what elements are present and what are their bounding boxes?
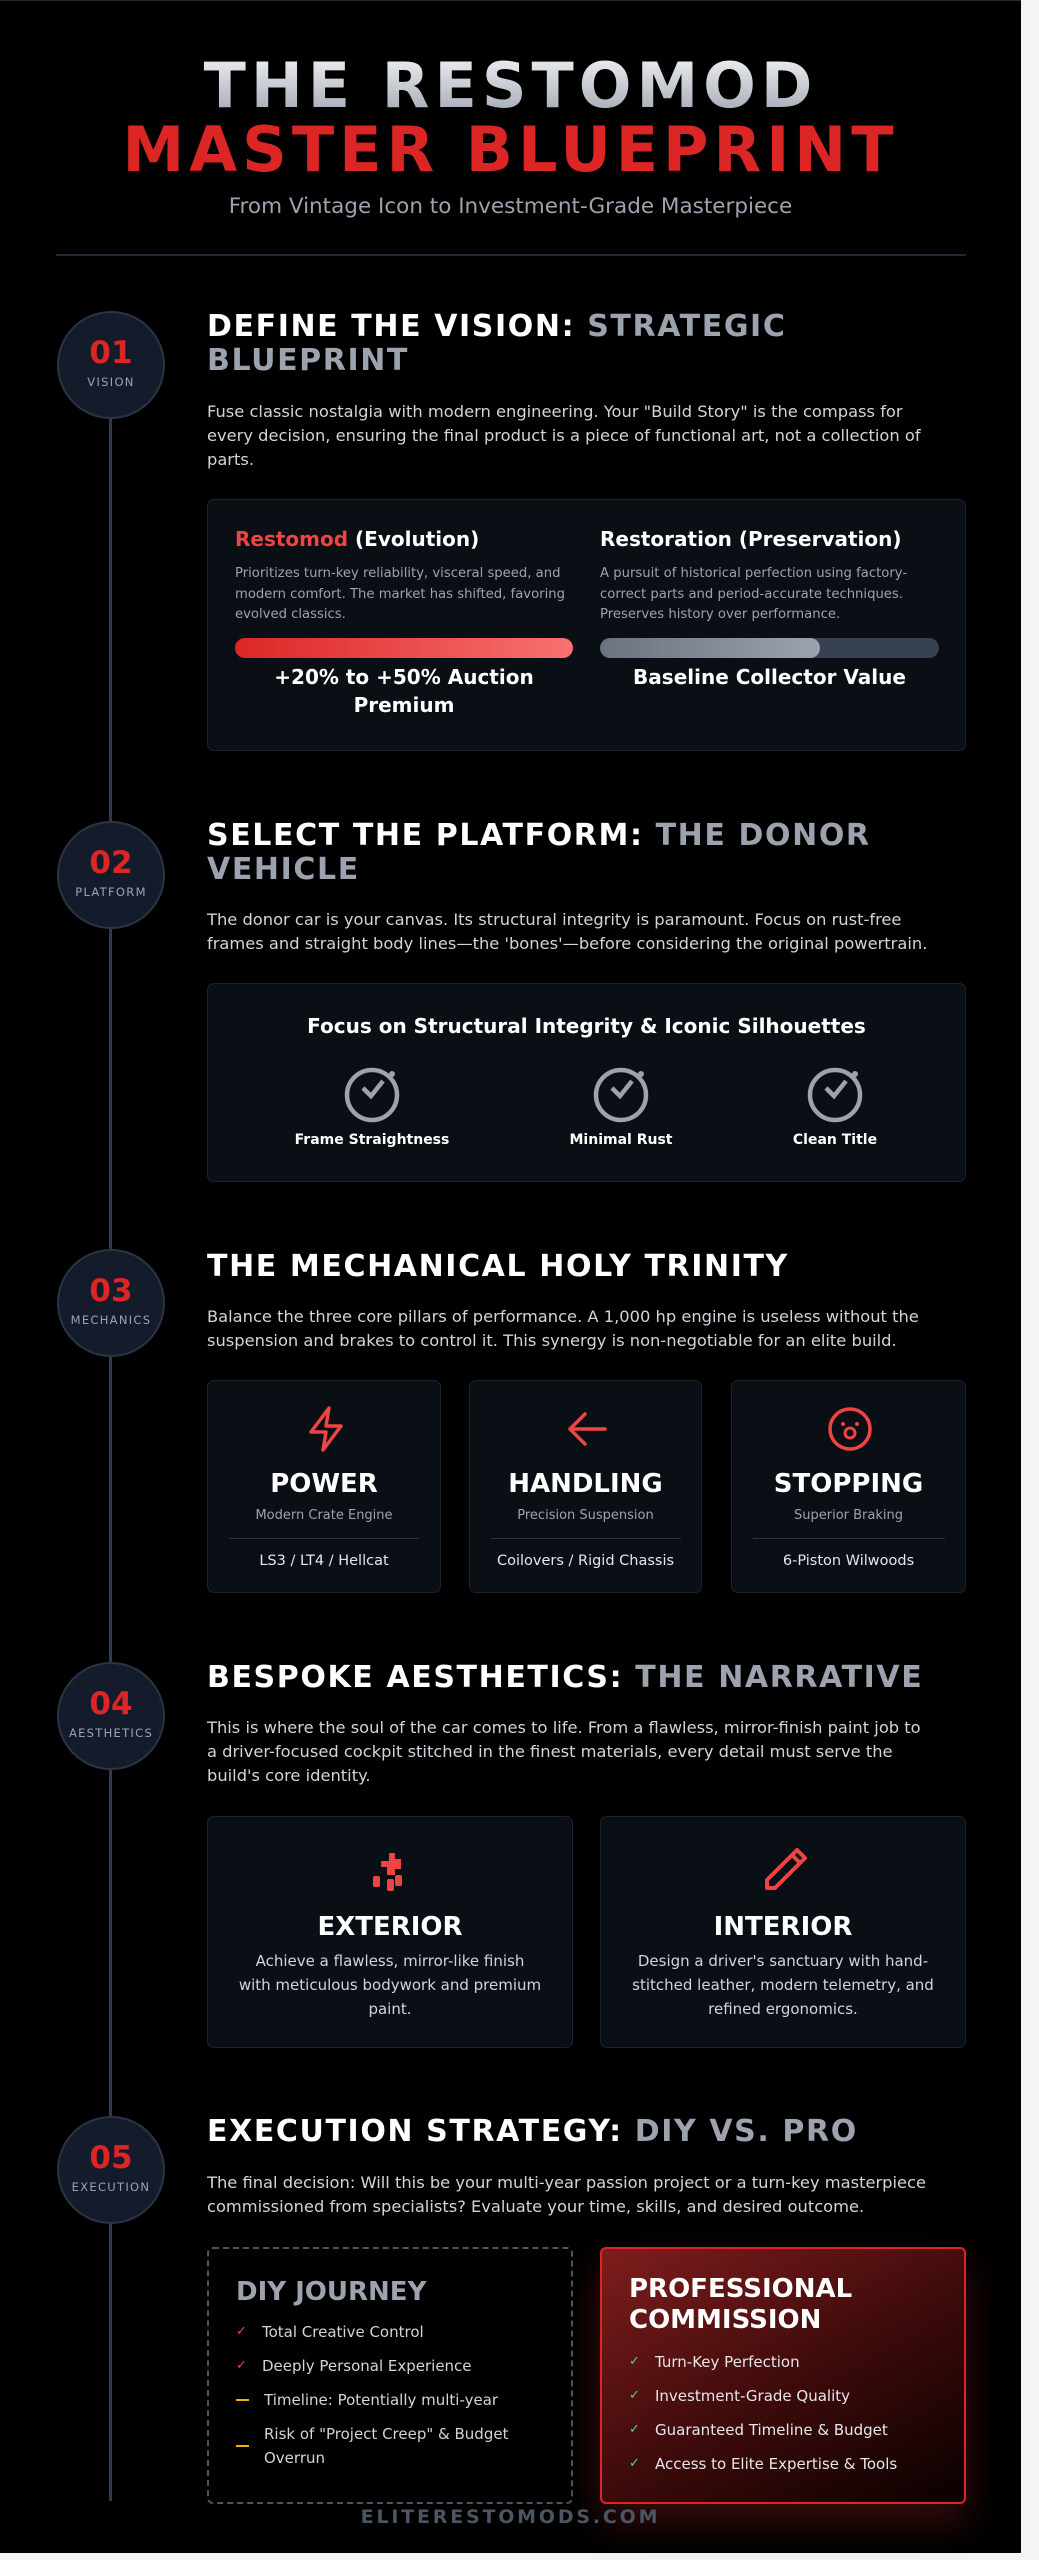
restomod column: Premium bbox=[354, 692, 454, 716]
panel: interior: INTERIOR bbox=[714, 1912, 852, 1942]
icon: clean title: Clean Title bbox=[793, 1132, 877, 1148]
panel: handling: HANDLING bbox=[508, 1469, 663, 1499]
list: pro points: ✓ bbox=[629, 2422, 640, 2437]
panel: power bbox=[207, 1380, 441, 1593]
panel: DIY journey bbox=[207, 2247, 573, 2504]
restomod column: Prioritizes turn-key reliability, visceral speed, and modern comfort. The market has shifted, favoring evolved classics. bbox=[235, 566, 565, 622]
section 1 marker bbox=[57, 311, 165, 419]
section 2 marker: 02 bbox=[89, 845, 133, 881]
title: THE RESTOMOD bbox=[204, 49, 817, 122]
list: pro points: Guaranteed Timeline & Budget bbox=[655, 2421, 888, 2439]
list: pro points: Access to Elite Expertise & Tools bbox=[655, 2455, 897, 2473]
section 2 marker: PLATFORM bbox=[75, 885, 147, 899]
section 1 marker: 01 bbox=[89, 335, 133, 371]
section 2 text: The donor car is your canvas. Its structural integrity is paramount. Focus on rust-free frames and straight body lines—the 'bones'—before considering the original powertrain. bbox=[207, 910, 927, 953]
list: pro points: ✓ bbox=[629, 2456, 640, 2471]
panel: handling: Coilovers / Rigid Chassis bbox=[497, 1553, 674, 1569]
section 1 marker: VISION bbox=[87, 375, 135, 389]
bar: restomod premium bbox=[235, 638, 573, 658]
section 3 text: Balance the three core pillars of performance. A 1,000 hp engine is useless without the suspension and brakes to control it. This synergy is non-negotiable for an elite build. bbox=[207, 1307, 919, 1350]
section 1 text: Fuse classic nostalgia with modern engineering. Your "Build Story" is the compass for every decision, ensuring the final product is a piece of functional art, not a collection of parts. bbox=[207, 402, 921, 469]
icon: frame straightness: Frame Straightness bbox=[295, 1132, 449, 1148]
subtitle: From Vintage Icon to Investment-Grade Masterpiece bbox=[229, 194, 792, 219]
restoration column bbox=[600, 527, 939, 688]
restoration column: Baseline Collector Value bbox=[633, 664, 906, 688]
restomod column: +20% to +50% Auction bbox=[274, 664, 534, 688]
section 5 text: The final decision: Will this be your multi-year passion project or a turn-key masterpiece commissioned from specialists? Evaluate your time, skills, and desired outcome. bbox=[207, 2173, 926, 2216]
panel: structural integrity bbox=[207, 983, 966, 1182]
list: pro points: Turn-Key Perfection bbox=[655, 2353, 800, 2371]
list: DIY points: Risk of "Project Creep" & Budget Overrun bbox=[264, 2425, 508, 2467]
panel: restomod vs restoration bbox=[207, 499, 966, 751]
list: DIY points: Timeline: Potentially multi-year bbox=[264, 2391, 498, 2409]
panel: stopping: Superior Braking bbox=[794, 1508, 903, 1523]
icon: minimal rust: Minimal Rust bbox=[570, 1132, 672, 1148]
timeline line bbox=[109, 365, 112, 2501]
panel: interior: Design a driver's sanctuary with hand-stitched leather, modern telemetry, and refined ergonomics. bbox=[632, 1952, 934, 2018]
icon: spray paint bbox=[373, 1853, 402, 1891]
section 5 marker: EXECUTION bbox=[72, 2180, 150, 2194]
restoration column: A pursuit of historical perfection using factory-correct parts and period-accurate techniques. Preserves history over performance. bbox=[600, 566, 907, 622]
list: DIY points: Deeply Personal Experience bbox=[262, 2357, 472, 2375]
list: pro points bbox=[629, 2353, 897, 2473]
panel: DIY journey: DIY JOURNEY bbox=[236, 2277, 426, 2307]
section 3 marker: 03 bbox=[89, 1273, 133, 1309]
panel: power: Modern Crate Engine bbox=[255, 1508, 393, 1523]
list: pro points: ✓ bbox=[629, 2354, 640, 2369]
section 3 marker: MECHANICS bbox=[71, 1313, 151, 1327]
list: pro points: ✓ bbox=[629, 2388, 640, 2403]
list: DIY points: ✓ bbox=[236, 2324, 247, 2339]
panel: exterior bbox=[207, 1816, 573, 2048]
restomod column: Restomod (Evolution) bbox=[235, 527, 479, 551]
restoration column: Restoration (Preservation) bbox=[600, 527, 902, 551]
section 5 marker bbox=[57, 2116, 165, 2224]
icon: pencil bbox=[765, 1848, 808, 1890]
panel: stopping: 6-Piston Wilwoods bbox=[783, 1553, 914, 1569]
section 5 marker: 05 bbox=[89, 2140, 133, 2176]
panel: power: POWER bbox=[270, 1469, 378, 1499]
panel: exterior: Achieve a flawless, mirror-like finish bbox=[256, 1952, 524, 1970]
panel: interior bbox=[600, 1816, 966, 2048]
section 3 heading: THE MECHANICAL HOLY TRINITY bbox=[207, 1249, 789, 1284]
icon: lightning bbox=[309, 1406, 343, 1452]
section 5 heading: EXECUTION STRATEGY: DIY VS. PRO bbox=[207, 2114, 858, 2149]
icon: brake disc bbox=[828, 1407, 872, 1451]
panel: stopping bbox=[731, 1380, 966, 1593]
section 1 heading: DEFINE THE VISION: STRATEGIC BLUEPRINT bbox=[207, 309, 786, 378]
panel: exterior: with meticulous bodywork and premium paint. bbox=[239, 1976, 541, 2018]
panel: professional commission: COMMISSION bbox=[629, 2305, 821, 2335]
section 4 marker bbox=[57, 1662, 165, 1770]
icon: minimal rust bbox=[570, 1068, 672, 1148]
icon: frame straightness bbox=[295, 1068, 449, 1148]
section 4 marker: AESTHETICS bbox=[69, 1726, 153, 1740]
list: DIY points bbox=[236, 2323, 508, 2467]
section 4 marker: 04 bbox=[89, 1686, 133, 1722]
footer: ELITERESTOMODS.COM bbox=[361, 2506, 660, 2528]
list: DIY points: Total Creative Control bbox=[262, 2323, 424, 2341]
section 2 marker bbox=[57, 821, 165, 929]
bar: restoration baseline bbox=[600, 638, 939, 658]
list: pro points: Investment-Grade Quality bbox=[655, 2387, 850, 2405]
section 2 heading: SELECT THE PLATFORM: THE DONOR VEHICLE bbox=[207, 818, 871, 887]
restomod column bbox=[235, 527, 573, 716]
title: MASTER BLUEPRINT bbox=[122, 113, 898, 186]
panel: power: LS3 / LT4 / Hellcat bbox=[259, 1553, 389, 1569]
panel: professional commission bbox=[600, 2247, 966, 2504]
section 4 heading: BESPOKE AESTHETICS: THE NARRATIVE bbox=[207, 1660, 923, 1695]
panel: handling bbox=[469, 1380, 702, 1593]
panel: professional commission: PROFESSIONAL bbox=[629, 2274, 852, 2304]
section 3 marker bbox=[57, 1249, 165, 1357]
title bbox=[122, 49, 898, 186]
panel: exterior: EXTERIOR bbox=[317, 1912, 463, 1942]
section 4 text: This is where the soul of the car comes to life. From a flawless, mirror-finish paint job to a driver-focused cockpit stitched in the finest materials, every detail must serve the build's core identity. bbox=[207, 1718, 921, 1785]
icon: arrow bbox=[568, 1412, 607, 1446]
panel: stopping: STOPPING bbox=[774, 1469, 923, 1499]
panel: handling: Precision Suspension bbox=[517, 1508, 654, 1523]
panel: structural integrity: Focus on Structural Integrity & Iconic Silhouettes bbox=[307, 1014, 866, 1038]
icon: clean title bbox=[793, 1068, 877, 1148]
list: DIY points: ✓ bbox=[236, 2358, 247, 2373]
